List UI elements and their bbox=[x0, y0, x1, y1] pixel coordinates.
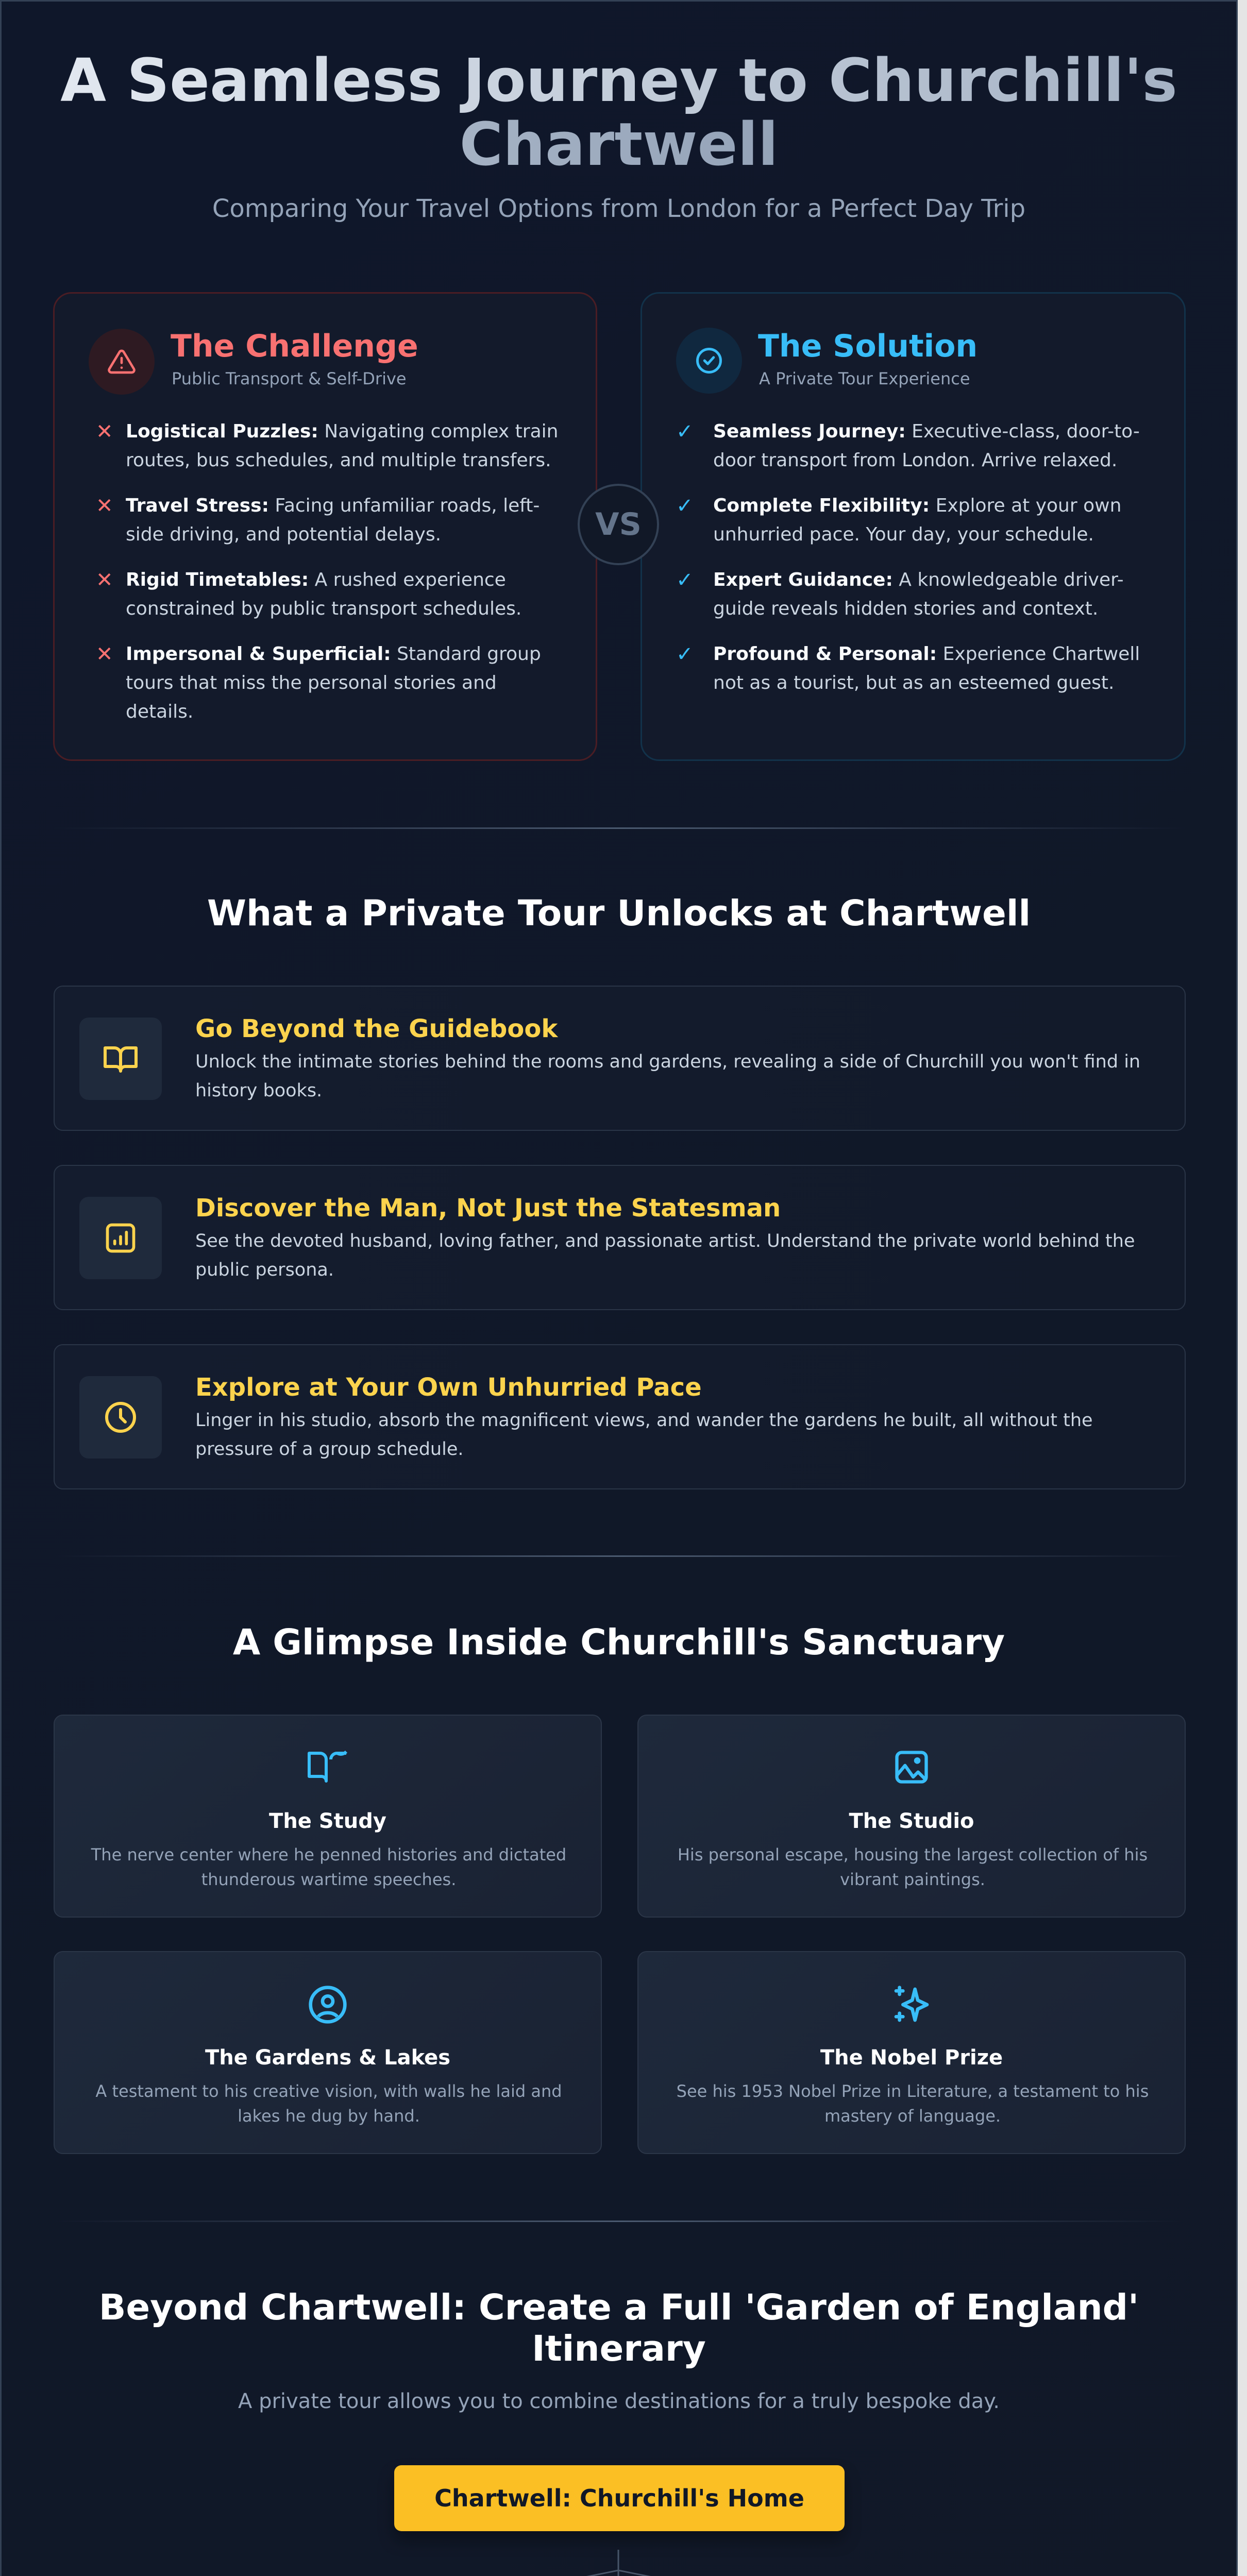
card: go beyond the guidebook bbox=[54, 986, 1186, 1131]
card: the study: The Study bbox=[269, 1809, 386, 1833]
card: the studio: His personal escape, housing the largest collection of his vibrant paintings. bbox=[678, 1845, 1148, 1889]
icon: sparkles bbox=[895, 1986, 929, 2022]
card: the studio: The Studio bbox=[849, 1809, 974, 1833]
icon: picture bbox=[895, 1751, 928, 1784]
card: go beyond the guidebook: Go Beyond the Guidebook bbox=[195, 1014, 558, 1043]
list: challenges: ✕ bbox=[96, 568, 113, 592]
card: nobel prize: See his 1953 Nobel Prize in Literature, a testament to his mastery of language. bbox=[677, 2081, 1149, 2126]
connector lines bbox=[586, 2550, 650, 2576]
heading: beyond chartwell: Beyond Chartwell: Create a Full 'Garden of England' bbox=[99, 2287, 1139, 2328]
card: gardens and lakes: A testament to his creative vision, with walls he laid and lakes he dug by hand. bbox=[95, 2081, 562, 2126]
list: solutions: ✓ bbox=[676, 420, 694, 444]
vs badge: VS bbox=[595, 506, 642, 543]
list: challenges: Logistical Puzzles: Navigating complex train routes, bus schedules, and multiple transfers. bbox=[126, 421, 558, 471]
text: beyond subtitle: A private tour allows you to combine destinations for a truly bespoke day. bbox=[238, 2389, 1000, 2413]
subtitle: Comparing Your Travel Options from London for a Perfect Day Trip bbox=[212, 194, 1025, 223]
heading: the challenge: The Challenge bbox=[171, 328, 418, 364]
card: gardens and lakes: The Gardens & Lakes bbox=[205, 2046, 450, 2070]
card: unhurried pace: Linger in his studio, absorb the magnificent views, and wander the gardens he built, all without the pressure of a group schedule. bbox=[195, 1410, 1093, 1460]
card: go beyond the guidebook: Unlock the intimate stories behind the rooms and gardens, revealing a side of Churchill you won't find in history books. bbox=[195, 1052, 1140, 1101]
list: challenges: ✕ bbox=[96, 494, 113, 518]
heading: the solution: The Solution bbox=[758, 328, 978, 364]
list: challenges: ✕ bbox=[96, 420, 113, 444]
card: the study: The nerve center where he penned histories and dictated thunderous wartime speeches. bbox=[91, 1845, 566, 1889]
list: solutions: Profound & Personal: Experience Chartwell not as a tourist, but as an esteemed guest. bbox=[713, 643, 1140, 693]
list: challenges: Impersonal & Superficial: Standard group tours that miss the personal stories and details. bbox=[126, 643, 541, 722]
card: gardens and lakes bbox=[54, 1951, 602, 2154]
button: chartwell home: Chartwell: Churchill's Home bbox=[434, 2484, 804, 2512]
list: solutions: ✓ bbox=[676, 494, 694, 518]
heading: glimpse inside: A Glimpse Inside Churchill's Sanctuary bbox=[233, 1622, 1005, 1663]
icon: book bbox=[79, 1018, 162, 1100]
list: challenges: Rigid Timetables: A rushed experience constrained by public transport schedules. bbox=[126, 569, 521, 619]
list: solutions: Expert Guidance: A knowledgeable driver-guide reveals hidden stories and context. bbox=[713, 569, 1124, 619]
subheading: Public Transport & Self-Drive bbox=[172, 369, 407, 388]
icon: location bbox=[309, 1986, 347, 2024]
card: discover the man: Discover the Man, Not Just the Statesman bbox=[195, 1194, 781, 1223]
card: discover the man: See the devoted husband, loving father, and passionate artist. Understand the private world behind the public persona. bbox=[195, 1231, 1135, 1280]
title bbox=[60, 46, 1177, 179]
card: unhurried pace bbox=[54, 1344, 1186, 1489]
card: unhurried pace: Explore at Your Own Unhurried Pace bbox=[195, 1373, 702, 1402]
list: challenges: ✕ bbox=[96, 642, 113, 666]
card: the study bbox=[54, 1715, 602, 1918]
card: nobel prize: The Nobel Prize bbox=[820, 2046, 1003, 2070]
heading: beyond chartwell bbox=[99, 2287, 1139, 2369]
vs badge bbox=[578, 484, 659, 565]
list: solutions: Seamless Journey: Executive-class, door-to-door transport from London. Arrive relaxed. bbox=[713, 421, 1140, 471]
heading: beyond chartwell: Itinerary bbox=[532, 2328, 706, 2369]
list: solutions bbox=[676, 420, 1140, 693]
panel: solution bbox=[641, 292, 1186, 761]
title: A Seamless Journey to Churchill's bbox=[60, 46, 1177, 115]
title: Chartwell bbox=[460, 110, 778, 179]
button: chartwell home bbox=[394, 2465, 845, 2531]
icon: warning bbox=[89, 329, 155, 395]
list: solutions: Complete Flexibility: Explore at your own unhurried pace. Your day, your schedule. bbox=[713, 495, 1121, 545]
list: challenges bbox=[96, 420, 558, 722]
icon: check circle bbox=[676, 328, 742, 394]
list: solutions: ✓ bbox=[676, 568, 694, 592]
card: the studio bbox=[637, 1715, 1186, 1918]
icon: open book bbox=[308, 1751, 347, 1783]
icon: chart bbox=[79, 1197, 162, 1279]
heading: private tour unlocks: What a Private Tour Unlocks at Chartwell bbox=[207, 893, 1031, 934]
card: discover the man bbox=[54, 1165, 1186, 1310]
list: solutions: ✓ bbox=[676, 642, 694, 666]
list: challenges: Travel Stress: Facing unfamiliar roads, left-side driving, and potential delays. bbox=[126, 495, 540, 545]
subheading: A Private Tour Experience bbox=[759, 369, 970, 388]
icon: clock bbox=[79, 1376, 162, 1459]
panel: challenge bbox=[53, 292, 597, 761]
card: nobel prize bbox=[637, 1951, 1186, 2154]
